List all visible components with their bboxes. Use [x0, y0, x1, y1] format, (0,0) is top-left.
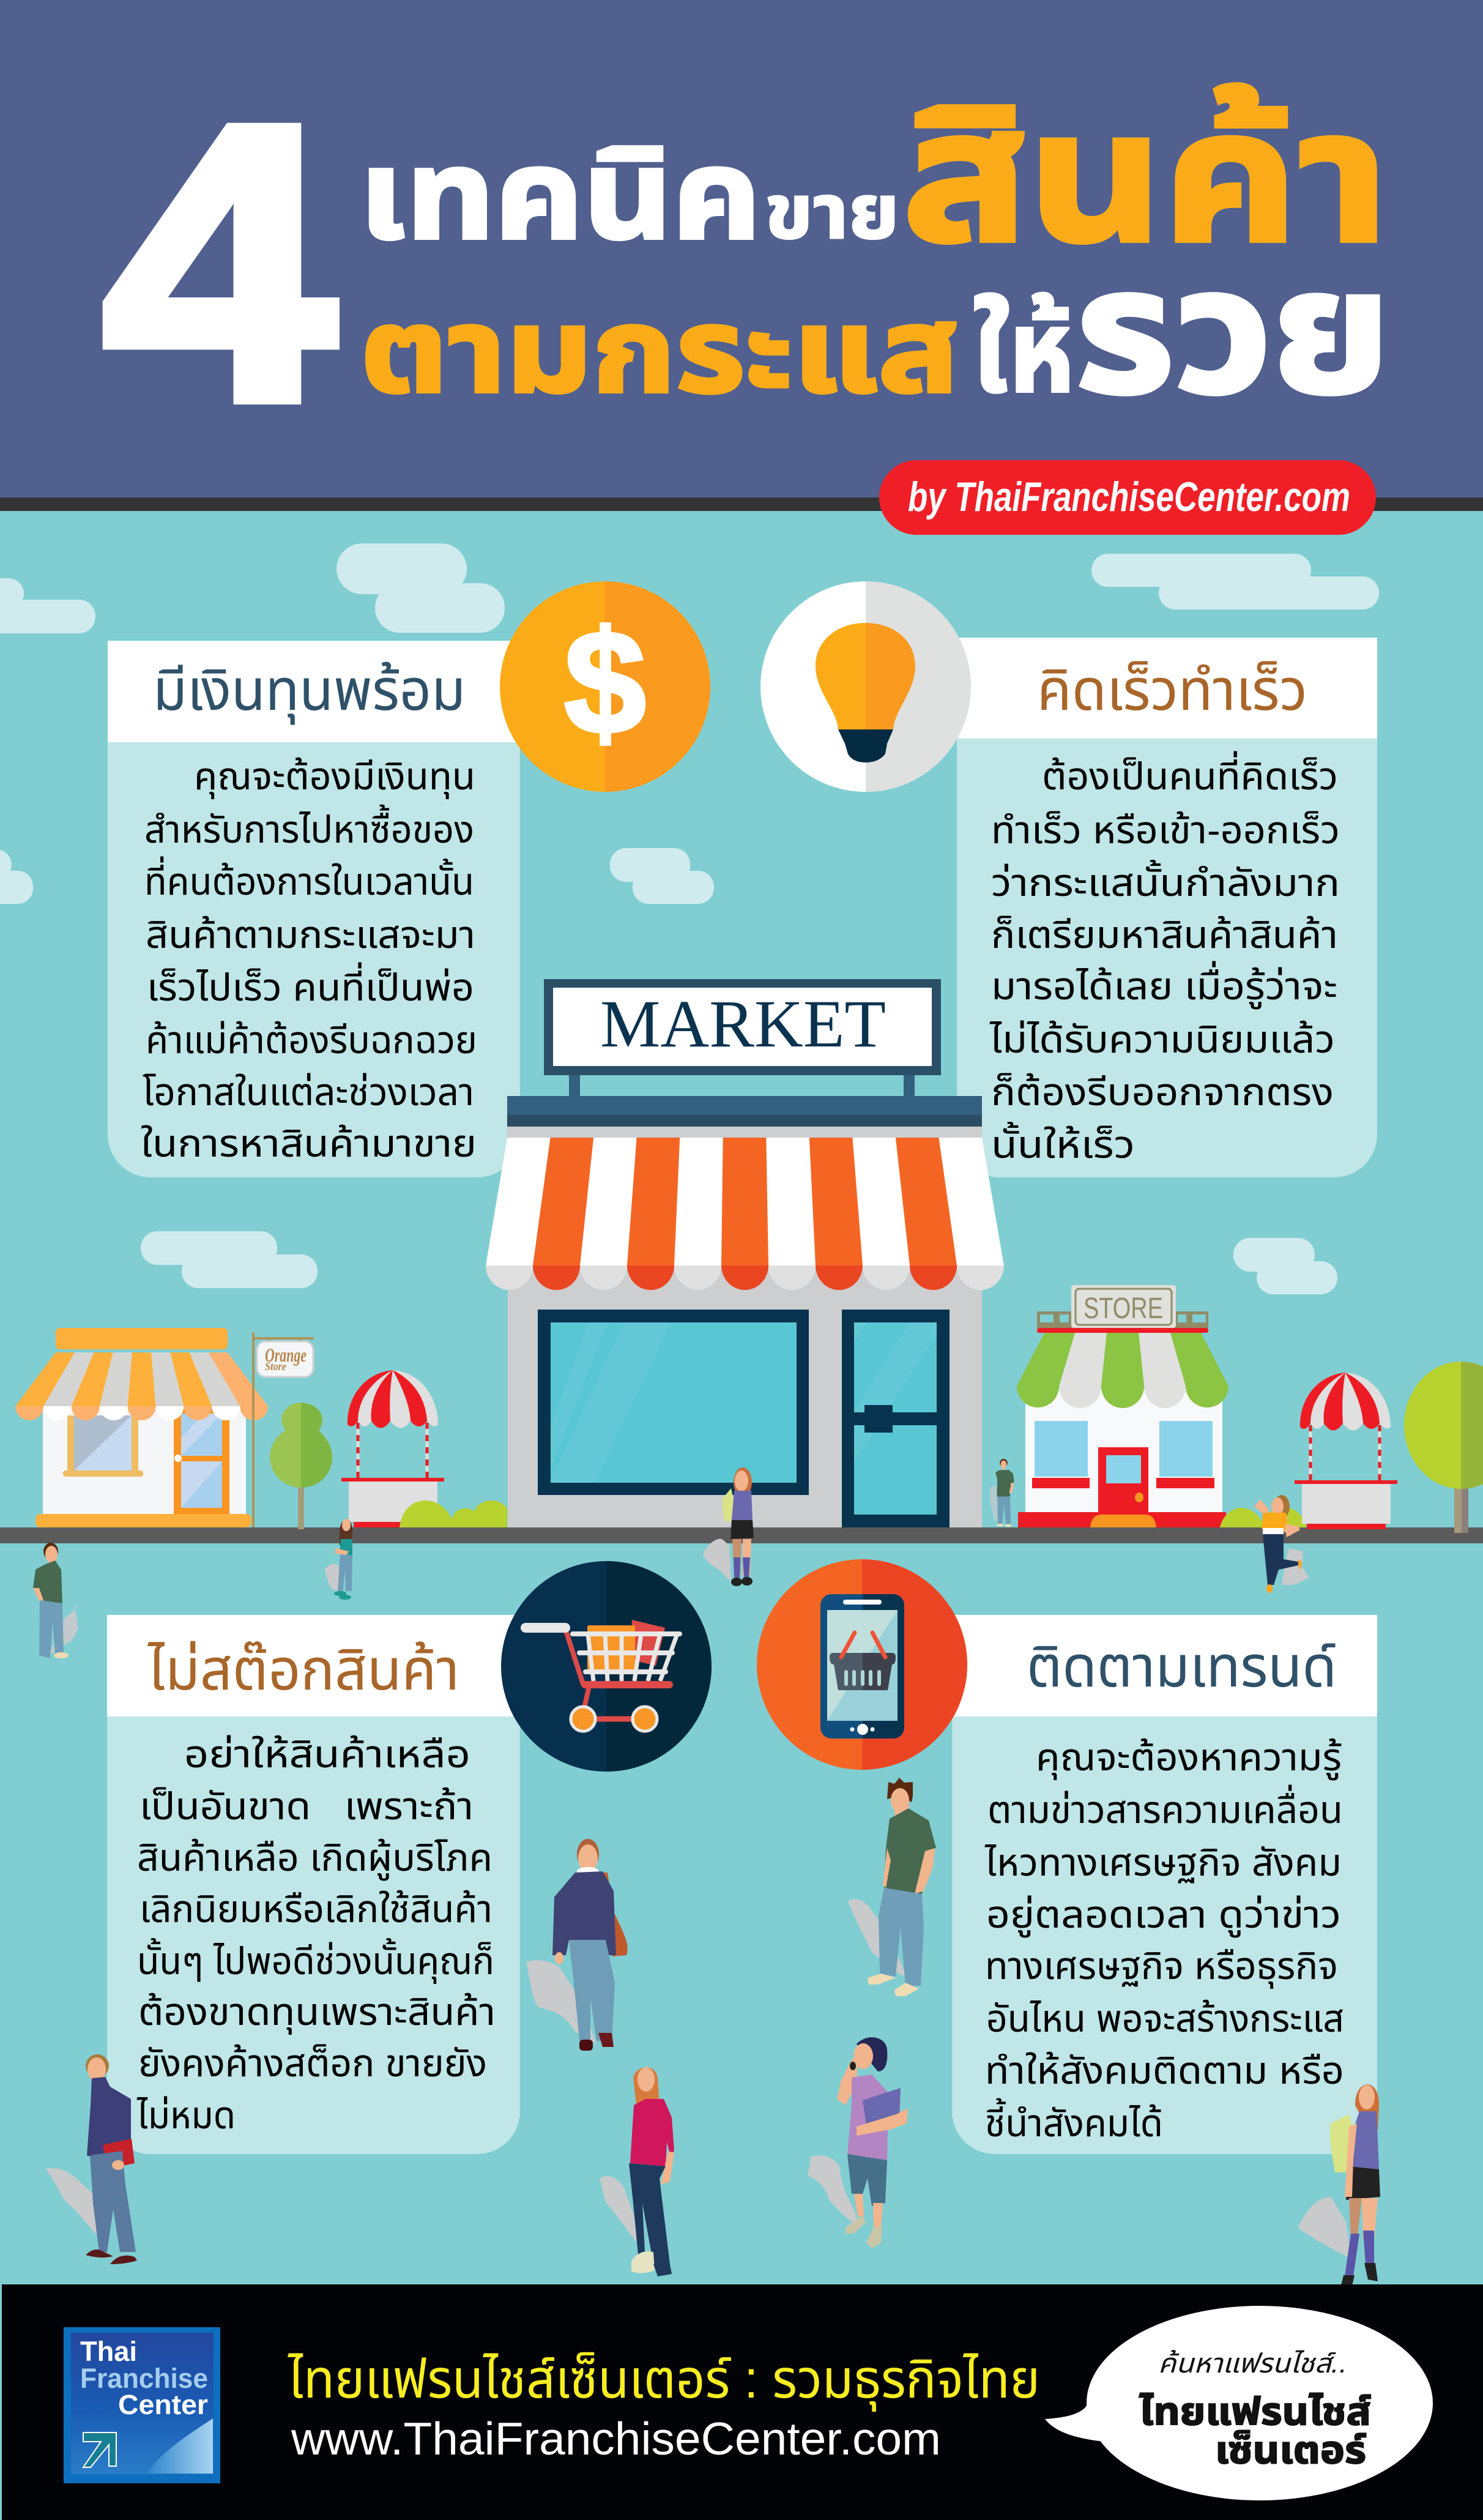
body text: follow trends: ทางเศรษฐกิจ หรือธุรกิจ [985, 1945, 1338, 1989]
market sign [544, 979, 941, 1096]
panel: money ready [108, 641, 530, 1177]
person: small man far left [33, 1543, 78, 1658]
bushes left [400, 1500, 507, 1527]
speech bubble: ค้นหาแฟรนไชส์.. [1158, 2349, 1347, 2379]
body text: no overstock: เลิกนิยมหรือเลิกใช้สินค้า [139, 1888, 492, 1931]
body text: no overstock [136, 1734, 496, 2137]
title line 2: ตามกระแส [360, 285, 959, 417]
speech bubble: เซ็นเตอร์ [1215, 2429, 1366, 2472]
body text: money ready: สินค้าตามกระแสจะมา [146, 914, 475, 956]
footer url: www.ThaiFranchiseCenter.com [291, 2413, 941, 2464]
hanging sign [252, 1332, 314, 1527]
logo: Thai [80, 2336, 137, 2367]
body text: no overstock: เป็นอันขาด เพราะถ้า [139, 1786, 474, 1828]
person: man in blue sweater with guitar [526, 1839, 628, 2051]
body text: think fast: มารอได้เลย เมื่อรู้ว่าจะ [991, 961, 1337, 1010]
body text: think fast: ไม่ได้รับความนิยมแล้ว [989, 1019, 1335, 1061]
body text: follow trends: คุณจะต้องหาความรู้ [1036, 1737, 1342, 1781]
person: woman on phone [808, 2037, 908, 2248]
body text: think fast: ก็ต้องรีบออกจากตรง [991, 1072, 1334, 1114]
body text: follow trends [984, 1737, 1344, 2145]
body text: follow trends: ไหวทางเศรษฐกิจ สังคม [984, 1842, 1342, 1884]
body text: think fast: ทำเร็ว หรือเข้า-ออกเร็ว [991, 810, 1340, 852]
body text: money ready: ในการหาสินค้ามาขาย [141, 1123, 477, 1165]
body text: money ready: โอกาสในแต่ละช่วงเวลา [143, 1072, 474, 1114]
door [1090, 1447, 1156, 1527]
icon: dollar coin: $ [564, 600, 646, 764]
orange awning [15, 1352, 268, 1420]
rail [1037, 1311, 1208, 1333]
kiosk left [341, 1370, 444, 1527]
person: woman orange top jumping [1254, 1495, 1309, 1593]
window [538, 1310, 809, 1495]
title line 1 [359, 74, 1389, 280]
icon: light bulb [760, 581, 971, 792]
body text: money ready: ที่คนต้องการในเวลานั้น [144, 856, 474, 903]
heading: money ready: มีเงินทุนพร้อม [153, 658, 466, 725]
body text: money ready: คุณจะต้องมีเงินทุน [194, 756, 475, 799]
store window [63, 1415, 143, 1477]
green awning [1017, 1333, 1228, 1408]
bushes right [1220, 1508, 1306, 1527]
body text: no overstock: ไม่หมด [136, 2095, 236, 2137]
body text: think fast: ก็เตรียมหาสินค้าสินค้า [991, 914, 1338, 956]
body text: money ready: เร็วไปเร็ว คนที่เป็นพ่อ [147, 962, 474, 1009]
person: small woman teal top [324, 1519, 352, 1600]
title: 4: 4 [103, 44, 338, 482]
title line 1: สินค้า [902, 74, 1389, 280]
body text: no overstock: นั้นๆ ไปพอดีช่วงนั้นคุณก็ [137, 1938, 494, 1984]
person: small man by green store [989, 1459, 1014, 1527]
panel: think fast [942, 638, 1377, 1177]
byline pill [879, 460, 1376, 535]
market sign: MARKET [600, 986, 886, 1061]
wall [1025, 1389, 1222, 1515]
tree left [270, 1403, 332, 1529]
body text: follow trends: ทำให้สังคมติดตาม หรือ [985, 2050, 1344, 2092]
person: woman in red top [600, 2067, 674, 2276]
speech bubble: ไทยแฟรนไชส์ [1139, 2391, 1371, 2433]
body text: think fast [989, 751, 1340, 1166]
body text: follow trends: อยู่ตลอดเวลา ดูว่าข่าว [986, 1894, 1341, 1938]
body text: think fast: นั้นให้เร็ว [991, 1122, 1135, 1166]
body text: money ready: สำหรับการไปหาซื้อของ [144, 804, 474, 851]
awning [486, 1138, 1004, 1290]
road [0, 1527, 1483, 1543]
heading: follow trends: ติดตามเทรนด์ [1027, 1635, 1337, 1699]
body text: follow trends: ชี้นำสังคมได้ [985, 2098, 1163, 2145]
person: man with red book [46, 2054, 137, 2264]
title line 2: ให้ [973, 287, 1074, 417]
hanging sign: Store [265, 1360, 286, 1373]
heading: think fast: คิดเร็วทำเร็ว [1037, 658, 1307, 722]
store door [174, 1407, 229, 1515]
logo: Center [118, 2389, 208, 2420]
wall [43, 1401, 246, 1515]
heading: no overstock: ไม่สต๊อกสินค้า [147, 1638, 459, 1702]
green store [1017, 1285, 1228, 1527]
roof [507, 1096, 982, 1138]
body text: follow trends: อันไหน พอจะสร้างกระแส [986, 1998, 1344, 2040]
store sign [1071, 1285, 1176, 1328]
body text: think fast: ว่ากระแสนั้นกำลังมาก [991, 860, 1340, 904]
body text: no overstock: ยังคงค้างสต็อก ขายยัง [138, 2043, 487, 2085]
body text: money ready: ค้าแม่ค้าต้องรีบฉกฉวย [146, 1020, 477, 1062]
door [842, 1310, 950, 1527]
title line 2 [360, 235, 1391, 428]
body text: no overstock: สินค้าเหลือ เกิดผู้บริโภค [137, 1837, 492, 1881]
title line 1: ขาย [765, 170, 899, 255]
title line 2: รวย [1076, 235, 1391, 428]
wall [508, 1261, 982, 1527]
logo [64, 2327, 220, 2483]
orange store [15, 1328, 314, 1527]
logo: Franchise [80, 2363, 208, 2394]
footer headline: ไทยแฟรนไชส์เซ็นเตอร์ : รวมธุรกิจไทย [287, 2349, 1040, 2412]
icon: shopping cart [501, 1561, 712, 1772]
body text: no overstock: อย่าให้สินค้าเหลือ [184, 1734, 470, 1776]
body text: no overstock: ต้องขาดทุนเพราะสินค้า [138, 1991, 496, 2035]
body text: money ready [141, 756, 477, 1165]
base [35, 1514, 251, 1527]
title line 1: เทคนิค [359, 125, 761, 265]
panel: follow trends [942, 1615, 1377, 2154]
tree right [1404, 1362, 1483, 1533]
store sign: STORE [1083, 1292, 1163, 1325]
clouds [0, 543, 1379, 1294]
icon: phone basket [757, 1559, 967, 1770]
hanging sign: Orange [265, 1344, 307, 1366]
panel: no overstock [107, 1615, 529, 2154]
byline pill: by ThaiFranchiseCenter.com [908, 474, 1350, 520]
person: woman with backpack large [1298, 2084, 1380, 2286]
windows [1032, 1421, 1214, 1488]
kiosk right [1295, 1373, 1397, 1529]
header banner [0, 0, 1483, 511]
body text: think fast: ต้องเป็นคนที่คิดเร็ว [1042, 751, 1338, 798]
person: woman with backpack near door [703, 1467, 754, 1586]
speech bubble [1045, 2306, 1433, 2500]
base [1018, 1512, 1226, 1527]
body text: follow trends: ตามข่าวสารความเคลื่อน [987, 1784, 1343, 1832]
market building [486, 979, 1004, 1527]
footer bar [2, 2284, 1483, 2520]
icon: dollar coin [500, 581, 710, 792]
person: man in green shirt large [848, 1778, 936, 1996]
roof bar [56, 1328, 228, 1349]
